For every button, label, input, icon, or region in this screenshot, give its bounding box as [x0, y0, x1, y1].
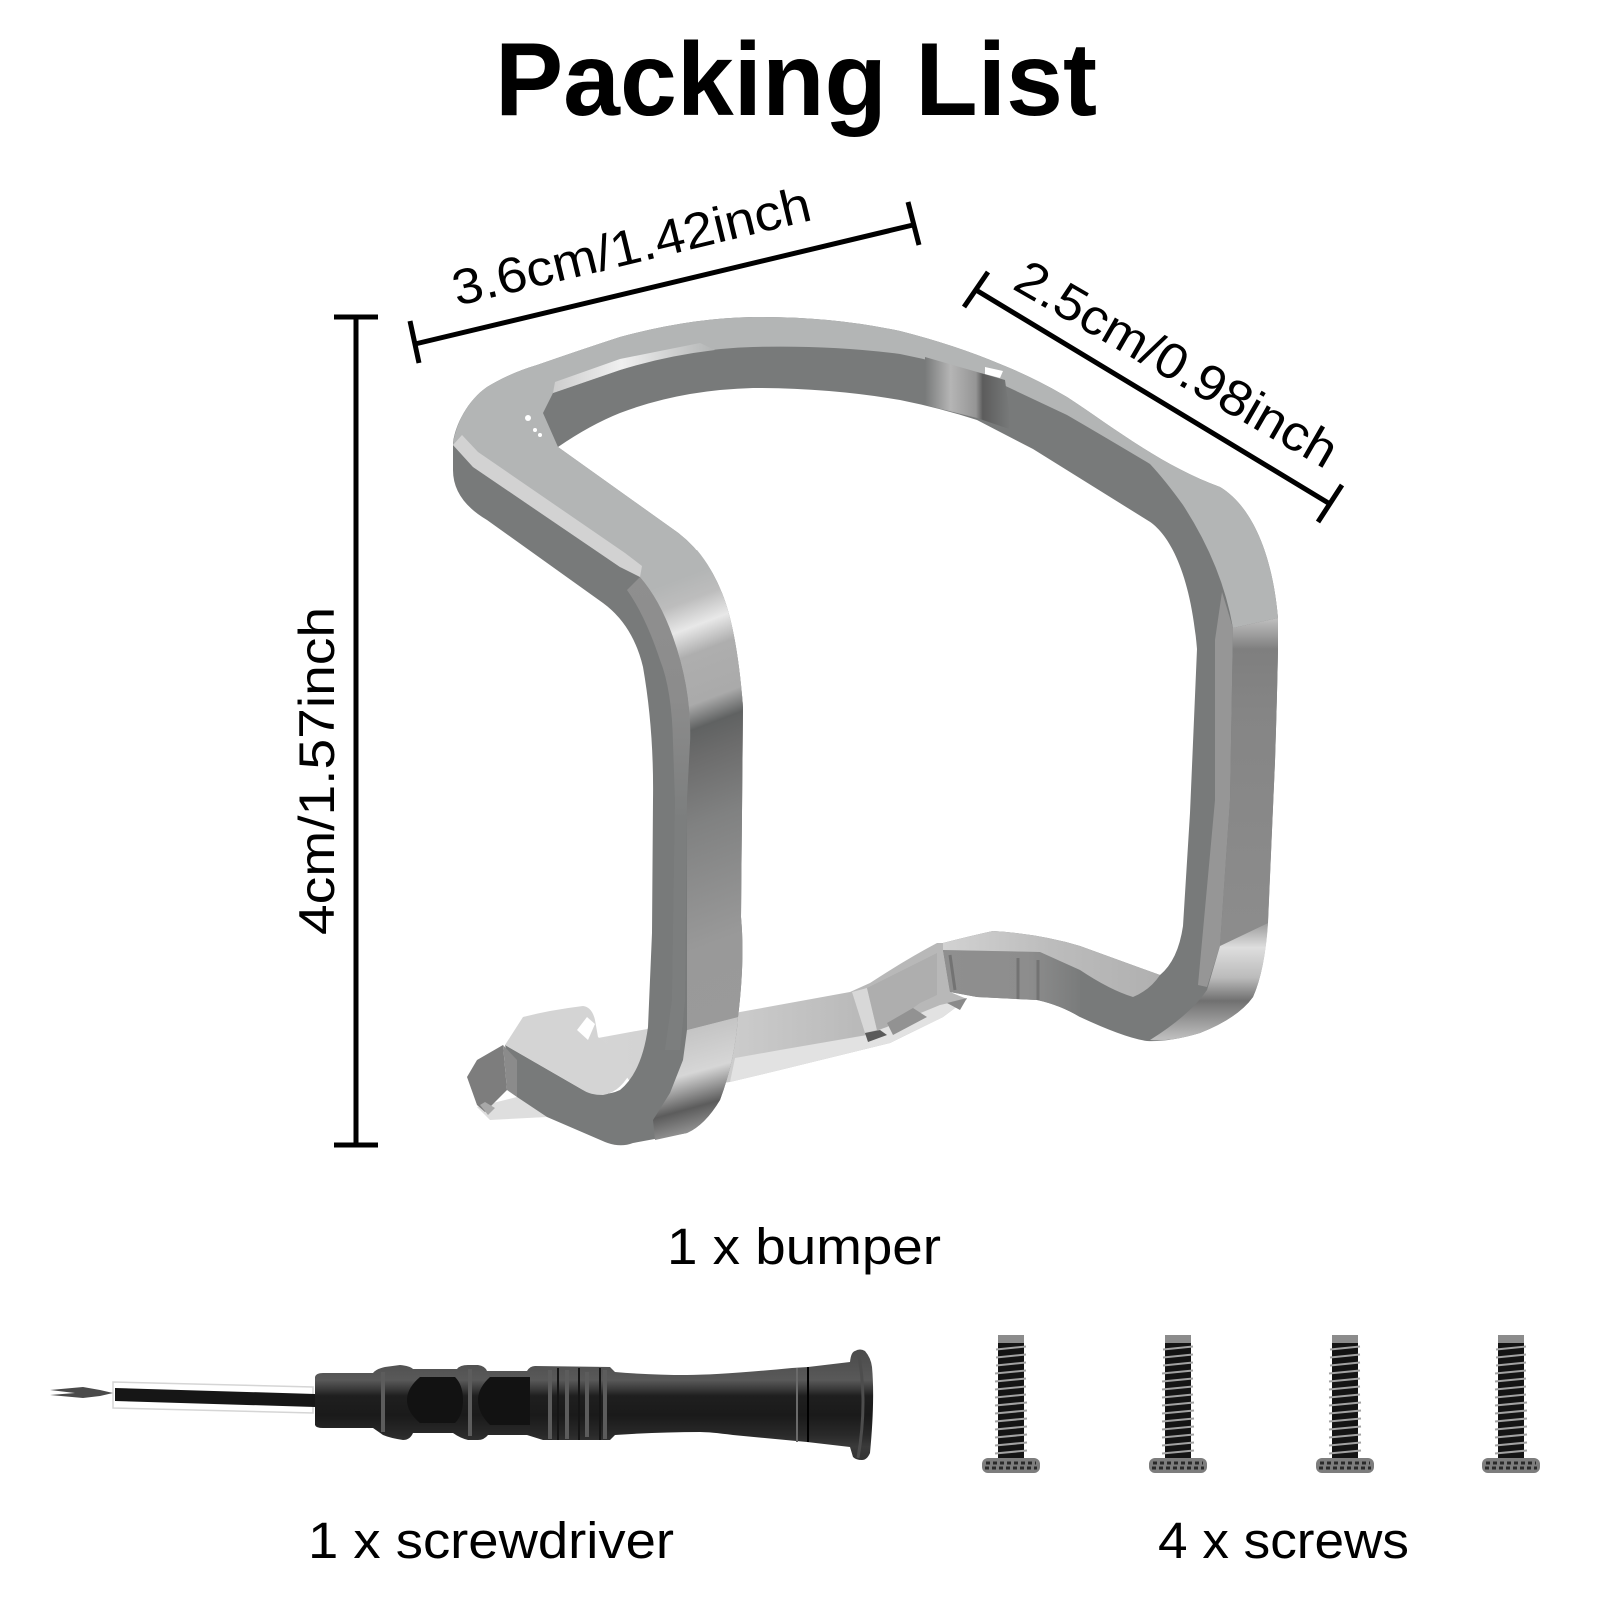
screw 2	[1149, 1335, 1207, 1473]
back bar rib	[852, 988, 877, 1033]
ceiling glint	[985, 367, 1003, 378]
back bar mid panel	[867, 953, 937, 1030]
lower right light face	[943, 931, 1160, 997]
back bar inset	[887, 1008, 927, 1035]
back bar clip	[947, 998, 967, 1010]
hook underside	[477, 1097, 547, 1120]
back bar hole	[865, 1030, 887, 1042]
left arm band	[627, 577, 690, 1050]
top face	[453, 317, 1278, 743]
title: Packing List	[495, 22, 1097, 138]
screwdriver collar	[796, 1368, 798, 1442]
hook light top	[505, 1006, 633, 1095]
top face inner highlight	[553, 343, 715, 393]
screwdriver cap highlight	[858, 1351, 863, 1458]
bumper frame	[453, 317, 1278, 1145]
lower right wall tone	[943, 950, 1080, 1017]
screwdriver rib gaps	[558, 1368, 600, 1440]
top face lower edge highlight	[453, 435, 642, 577]
right lower curve	[1150, 923, 1268, 1040]
screwdriver handle	[315, 1350, 873, 1460]
label: screwdriver: 1 x screwdriver	[308, 1512, 674, 1569]
dimension: height 4cm/1.57inch	[289, 317, 378, 1145]
screwdriver shaft	[113, 1382, 313, 1413]
back bar	[598, 943, 967, 1095]
screw 3	[1316, 1335, 1374, 1473]
screwdriver collar line	[807, 1367, 809, 1442]
dimension: height 4cm/1.57inch: 4cm/1.57inch	[289, 607, 345, 935]
lower right wall ribs	[950, 955, 1038, 1000]
hook tip facet	[480, 1102, 495, 1115]
screw 4	[1482, 1335, 1540, 1473]
dimension: depth 2.5cm/0.98inch	[964, 249, 1348, 522]
hook left tip	[467, 1045, 507, 1112]
corner specks	[525, 415, 542, 437]
screw 1	[982, 1335, 1040, 1473]
dimension: depth 2.5cm/0.98inch: 2.5cm/0.98inch	[1006, 249, 1348, 479]
screwdriver grip facets	[407, 1377, 530, 1425]
right side strip	[1220, 618, 1278, 946]
frame body	[453, 317, 1278, 1145]
label: screws: 4 x screws	[1158, 1512, 1409, 1569]
hook notch	[577, 1017, 595, 1040]
hook side facet	[503, 1045, 517, 1097]
dimension: width 3.6cm/1.42inch	[410, 176, 919, 363]
label: bumper: 1 x bumper	[667, 1218, 941, 1275]
ceiling reflection	[925, 357, 1012, 430]
screwdriver ribs	[383, 1369, 605, 1439]
left arm outer strip	[640, 550, 743, 1030]
dimension: width 3.6cm/1.42inch: 3.6cm/1.42inch	[446, 176, 816, 317]
left arm lower curve	[653, 1017, 738, 1140]
screwdriver tip	[50, 1387, 113, 1398]
back bar lower strip	[730, 999, 967, 1082]
screwdriver shaft core	[115, 1388, 315, 1407]
right side mid band	[1198, 592, 1233, 987]
screwdriver	[50, 1350, 873, 1460]
